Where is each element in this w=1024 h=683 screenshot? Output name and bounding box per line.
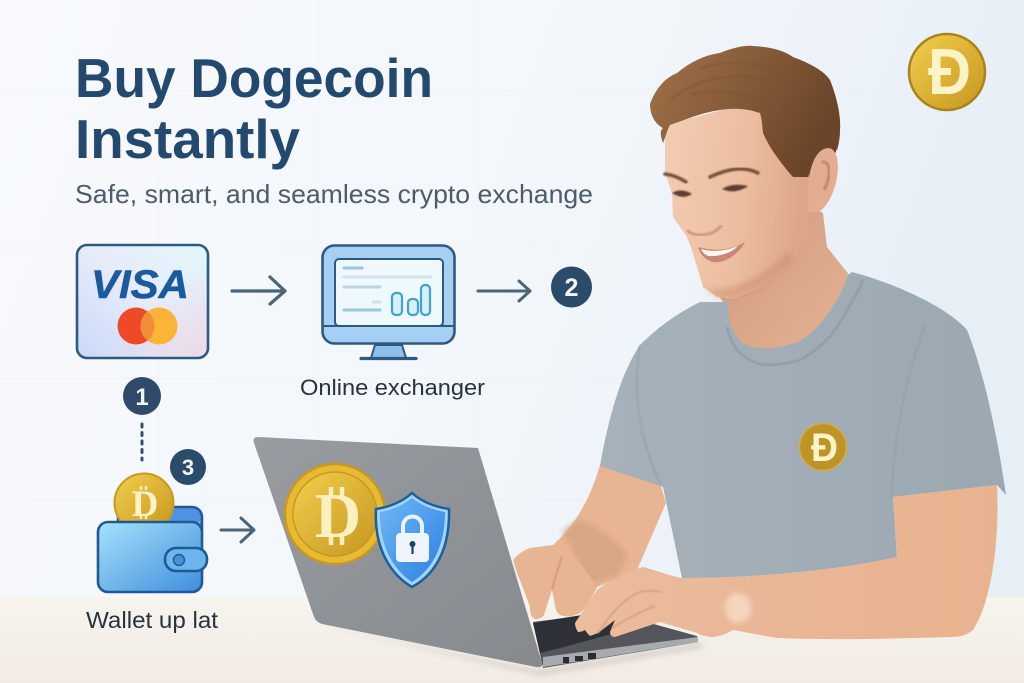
step badge 2: 2: [565, 274, 578, 302]
label: wallet: Wallet up lat: [86, 607, 219, 633]
laptop lid: [254, 437, 542, 667]
wallet coin: D: [132, 484, 158, 525]
step badge 2: [551, 266, 592, 308]
near hand finger lines: [598, 591, 662, 633]
eyes: [672, 185, 748, 197]
shirt logo coin: Ð: [811, 426, 838, 470]
far arm: [553, 465, 666, 590]
step badge 1: [123, 377, 161, 415]
wrist highlight: [725, 593, 751, 623]
laptop ports: [563, 653, 596, 663]
dotted connector: [140, 424, 144, 460]
hair behind ear: [790, 130, 838, 180]
person: [553, 46, 1006, 639]
face: [665, 100, 810, 299]
shield with padlock: [376, 493, 449, 587]
teeth: [701, 246, 738, 256]
shirt logo coin: [800, 424, 846, 470]
icon: wallet with coin: [98, 474, 207, 592]
logo coin: top right: Ð: [928, 35, 971, 108]
payment card: [77, 245, 208, 358]
near arm: [682, 485, 998, 639]
near hand: [575, 567, 765, 637]
hands: [513, 545, 765, 637]
arrow: wallet to laptop: [221, 518, 254, 542]
far hand finger lines: [552, 556, 562, 590]
logo coin: top right: [909, 34, 985, 110]
laptop: [254, 437, 705, 676]
subtitle: Safe, smart, and seamless crypto exchange: [75, 179, 593, 209]
nose shadow: [688, 226, 721, 235]
jaw shading: [703, 250, 793, 299]
mouth: [698, 242, 745, 262]
laptop base and keyboard: [533, 612, 698, 668]
ear: [806, 148, 838, 213]
icon: monitor: [322, 246, 454, 358]
head: [650, 46, 840, 299]
laptop coin: [285, 464, 385, 564]
table shadow: [318, 625, 705, 676]
step badge 3: 3: [182, 455, 194, 480]
visa logo: VISA: [91, 263, 189, 307]
far arm shading: [563, 520, 628, 585]
mastercard logo: [118, 308, 178, 344]
shirt collar: [727, 280, 863, 365]
arrow: card to exchanger: [232, 277, 285, 304]
table: [0, 597, 1024, 683]
title: [75, 47, 433, 170]
step badge 3: [170, 449, 206, 485]
eyebrows: [665, 169, 758, 182]
far hand: [513, 545, 597, 619]
neck: [715, 200, 850, 355]
shirt sleeve seams: [637, 325, 925, 497]
laptop coin: D: [315, 480, 361, 551]
arrow: exchanger to step 2: [478, 281, 530, 301]
title: Buy Dogecoin: [75, 47, 433, 109]
shirt: [600, 272, 1006, 578]
label: online exchanger: Online exchanger: [300, 375, 486, 400]
step badge 1: 1: [135, 384, 149, 411]
hair strands: [670, 63, 805, 120]
padlock: [396, 516, 429, 562]
title: Instantly: [75, 108, 300, 170]
hair: [650, 46, 840, 177]
